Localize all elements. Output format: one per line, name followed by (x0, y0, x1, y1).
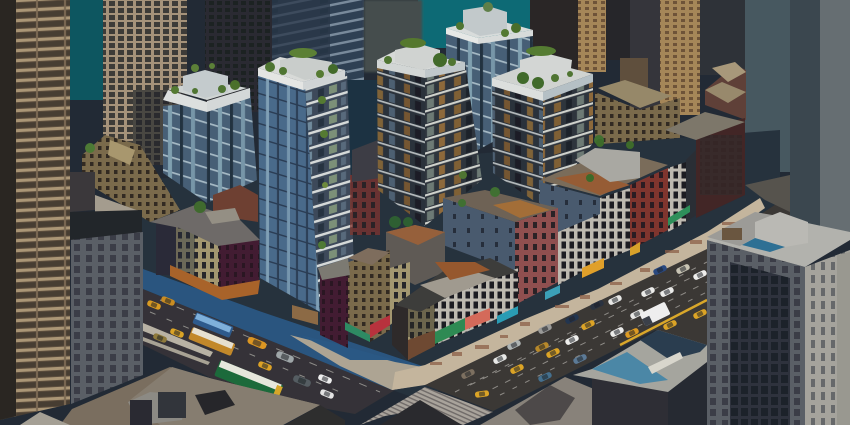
cars on avenue (460, 263, 708, 398)
cars on left road (146, 296, 335, 399)
crosswalk (360, 387, 493, 425)
row of townhouses (292, 248, 410, 348)
left sidewalk (143, 269, 428, 390)
small red building behind (350, 140, 380, 235)
tower: upper left tan (103, 0, 187, 165)
tower: far left tan high rise (0, 0, 70, 420)
avenue sidewalk (392, 198, 765, 390)
dark building with blue roof (573, 330, 707, 425)
rooftop bottom left (20, 367, 345, 425)
main avenue (425, 195, 790, 411)
small building: rooftop far right (705, 62, 746, 120)
rooftop bottom centre (480, 377, 630, 425)
building: grey with brown roof (386, 216, 445, 285)
row of small buildings left (150, 185, 260, 300)
top right road stub (745, 175, 790, 212)
right foreground high rise (707, 212, 850, 425)
building: blue side and rose brick (443, 187, 604, 305)
corner building white and dark (392, 258, 518, 360)
building: stepped tan left (82, 135, 180, 222)
white delivery truck (639, 302, 671, 326)
water (68, 0, 533, 100)
left road (143, 289, 395, 414)
tower: glass C back (446, 2, 533, 150)
buses on left road (188, 312, 284, 401)
mid-left grey building (70, 172, 143, 404)
tower: glass B (377, 38, 482, 226)
dark gap between towers (345, 80, 385, 170)
building: tan classical (595, 58, 680, 160)
block of brick buildings on avenue (540, 112, 745, 262)
distant towers (205, 0, 850, 240)
tower: glass E (163, 63, 257, 203)
ground shadow mid block (140, 130, 780, 400)
tower: glass D (492, 46, 604, 207)
tower: glass A (258, 48, 355, 312)
